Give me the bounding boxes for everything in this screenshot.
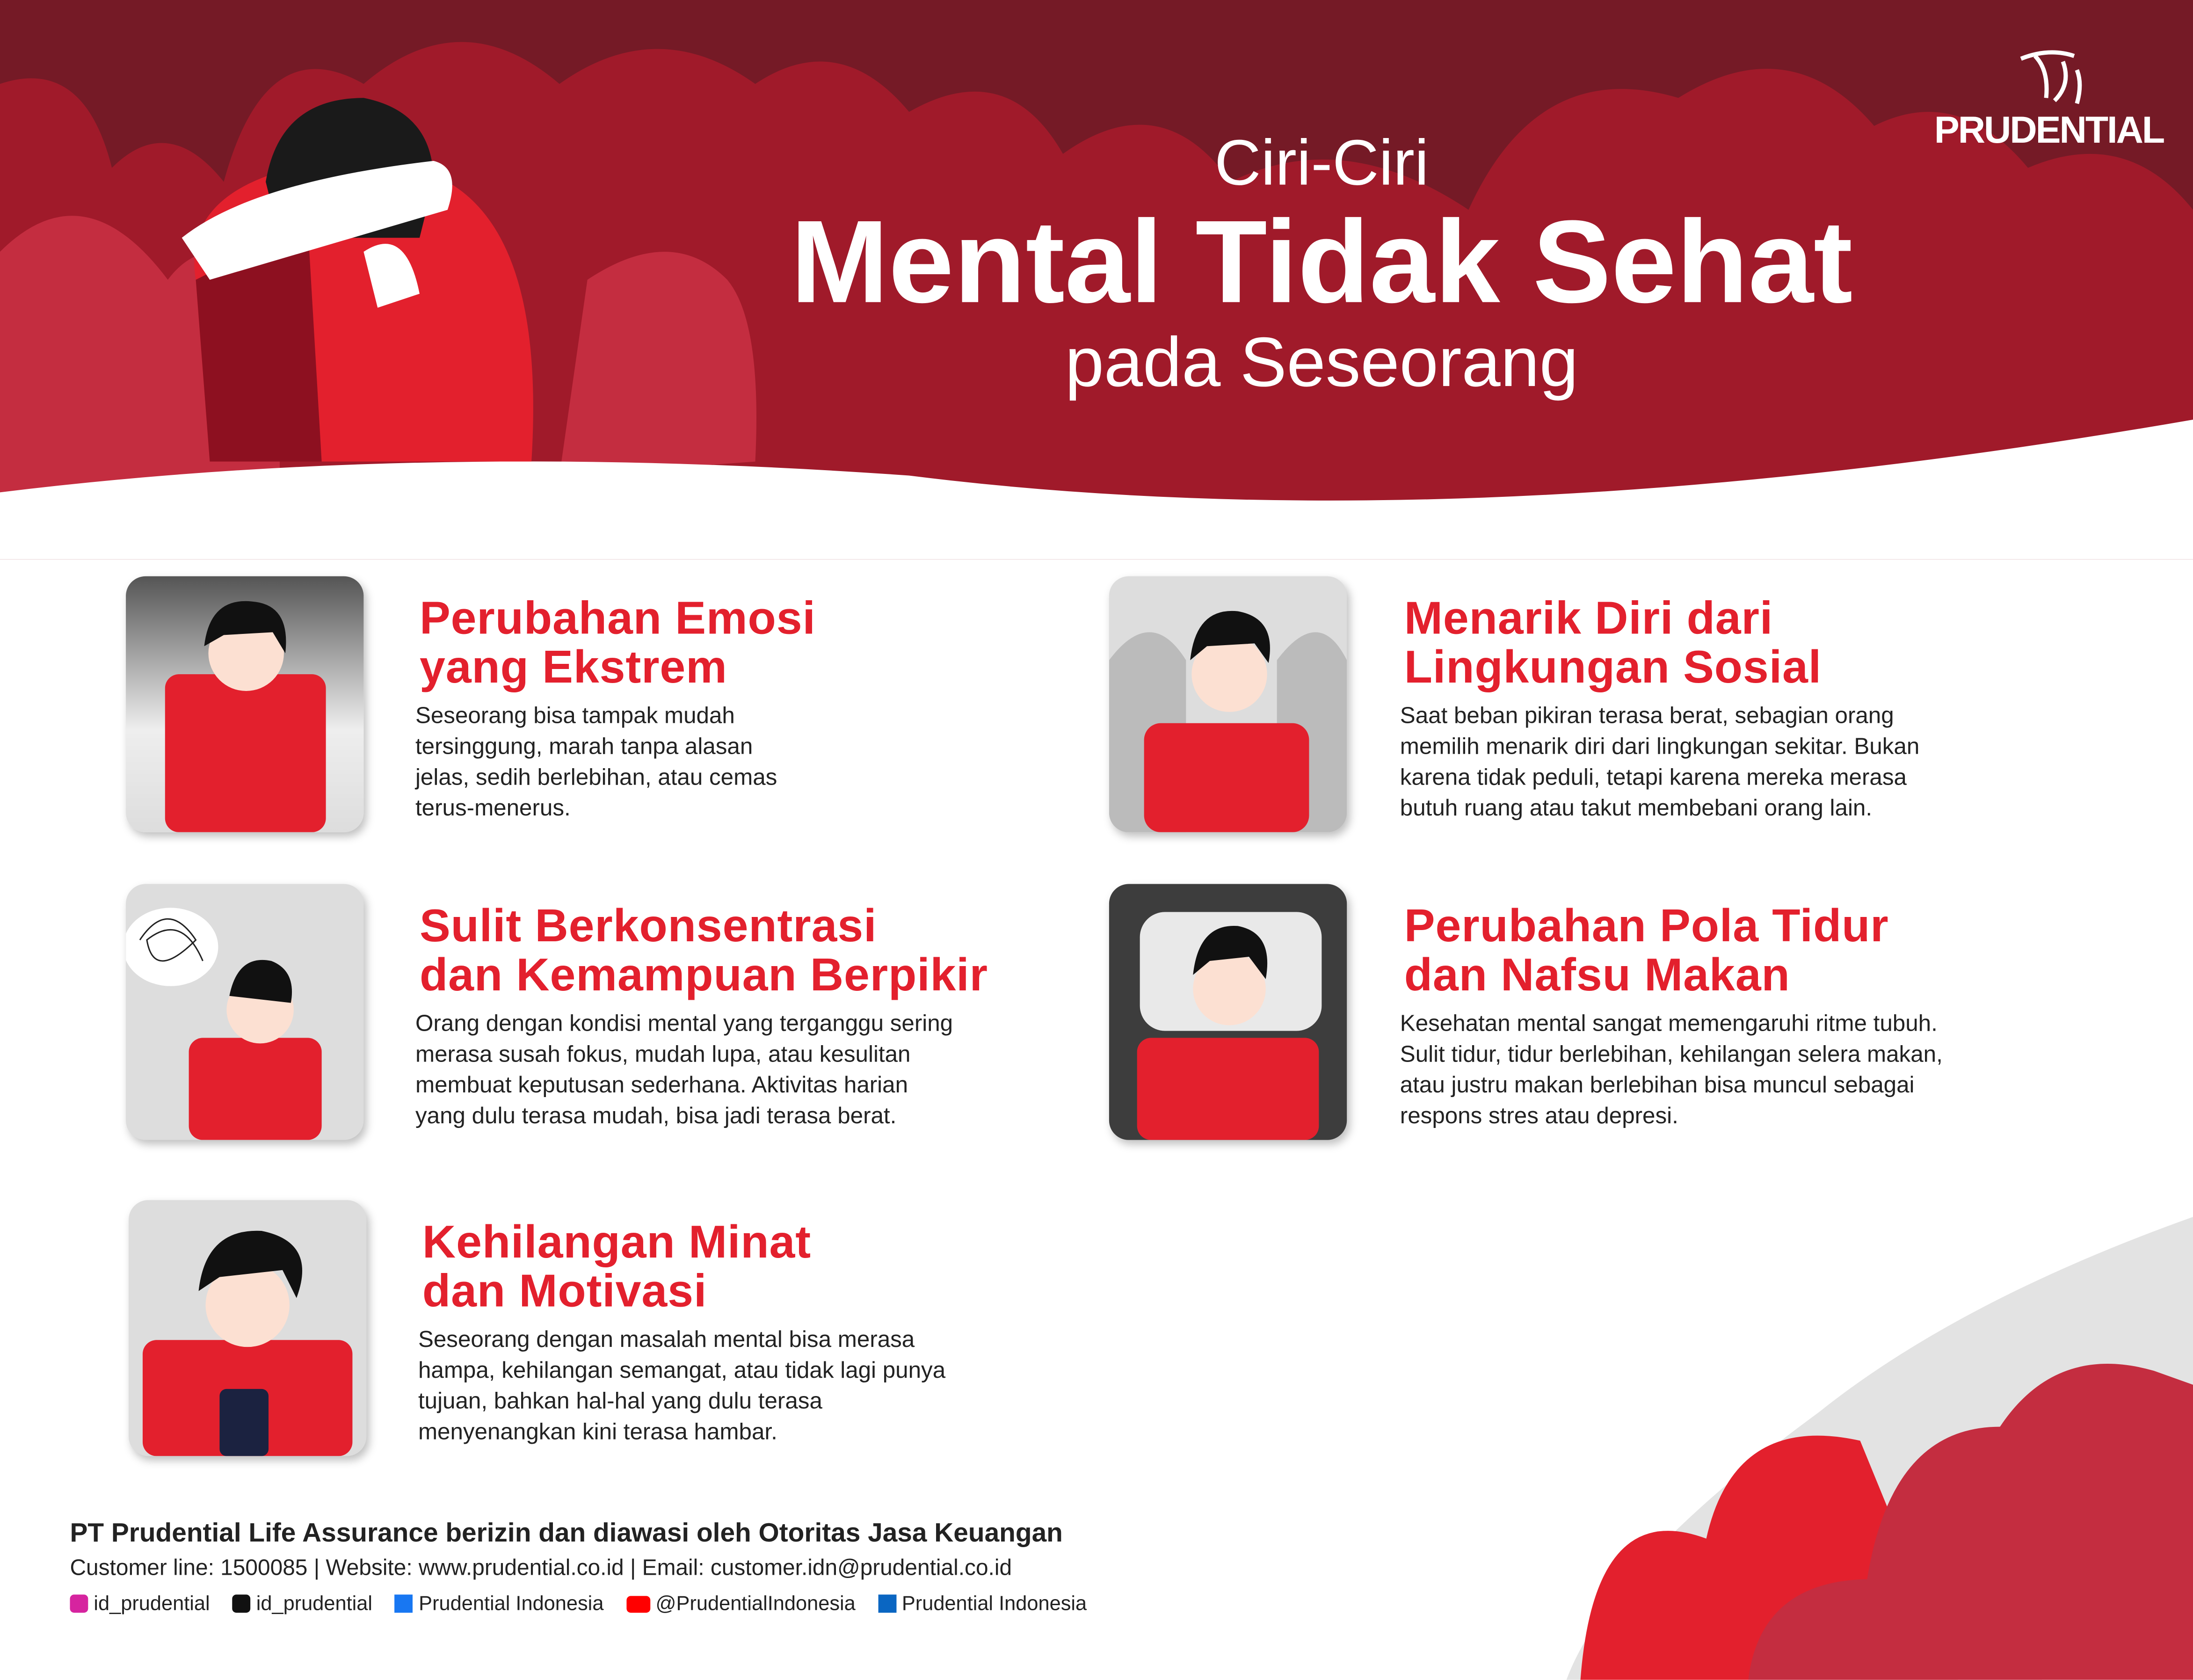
text: atau justru makan berlebihan bisa muncul sebagai <box>1400 1073 1914 1098</box>
panel: tidur <box>1091 867 2070 1175</box>
heading: Perubahan Pola Tidur <box>1404 899 1889 951</box>
footer <box>0 1511 1147 1622</box>
text: butuh ruang atau takut membebani orang lain. <box>1400 796 1872 821</box>
heading: dan Kemampuan Berpikir <box>420 948 988 1000</box>
text: terus-menerus. <box>415 796 571 821</box>
title <box>755 123 1888 403</box>
heading: Perubahan Emosi <box>420 592 816 643</box>
text: merasa susah fokus, mudah lupa, atau kesulitan <box>415 1042 910 1067</box>
text: Seseorang dengan masalah mental bisa merasa <box>418 1327 915 1353</box>
text: respons stres atau depresi. <box>1400 1104 1678 1129</box>
icon: sleepless boy <box>1109 884 1347 1140</box>
panel: sosial <box>1091 560 2070 839</box>
header background <box>0 0 2193 560</box>
icon: confused boy <box>126 884 363 1140</box>
text <box>415 701 777 824</box>
heading: dan Motivasi <box>422 1265 707 1316</box>
text <box>415 1009 953 1132</box>
title: Mental Tidak Sehat <box>791 196 1852 327</box>
heading <box>1404 593 1822 691</box>
footer: PT Prudential Life Assurance berizin dan diawasi oleh Otoritas Jasa Keuangan <box>70 1519 1063 1549</box>
text: tersinggung, marah tanpa alasan <box>415 735 753 759</box>
social icons: id_prudential id_prudential Prudential Indonesia @PrudentialIndonesia Prudential Indonesia <box>94 1593 1087 1615</box>
heading: Menarik Diri dari <box>1404 592 1773 643</box>
text <box>1400 1009 1943 1132</box>
footer: Customer line: 1500085 | Website: www.prudential.co.id | Email: customer.idn@prudential.co.id <box>70 1557 1012 1580</box>
heading: dan Nafsu Makan <box>1404 948 1790 1000</box>
text: Orang dengan kondisi mental yang terganggu sering <box>415 1011 953 1036</box>
text: tujuan, bahkan hal-hal yang dulu terasa <box>418 1389 822 1414</box>
text: hampa, kehilangan semangat, atau tidak lagi punya <box>418 1358 945 1383</box>
logo: PRUDENTIAL <box>1934 109 2164 151</box>
heading: Kehilangan Minat <box>422 1215 811 1267</box>
panel: motivasi <box>0 1183 1063 1477</box>
illustration: sad woman hugging knees <box>168 84 574 462</box>
heading: Sulit Berkonsentrasi <box>420 899 877 951</box>
bottom right decoration <box>1399 1217 2193 1680</box>
title: Ciri-Ciri <box>1214 126 1429 199</box>
text: jelas, sedih berlebihan, atau cemas <box>415 765 777 790</box>
logo <box>1930 42 2168 154</box>
text: Seseorang bisa tampak mudah <box>415 704 735 729</box>
heading <box>1404 901 1889 999</box>
text: memilih menarik diri dari lingkungan sekitar. Bukan <box>1400 735 1919 759</box>
text: Kesehatan mental sangat memengaruhi ritme tubuh. <box>1400 1011 1938 1036</box>
text: membuat keputusan sederhana. Aktivitas harian <box>415 1073 908 1098</box>
text: yang dulu terasa mudah, bisa jadi terasa berat. <box>415 1104 896 1129</box>
heading <box>420 593 816 691</box>
text: Saat beban pikiran terasa berat, sebagian orang <box>1400 704 1894 729</box>
title: pada Seseorang <box>1065 323 1578 401</box>
text: karena tidak peduli, tetapi karena mereka merasa <box>1400 765 1907 790</box>
text <box>1400 701 1919 824</box>
icon: withdrawn boy <box>1109 576 1347 832</box>
icon: sad boy <box>126 576 363 832</box>
panel: emosi <box>0 560 1063 839</box>
heading <box>422 1217 811 1315</box>
icon: boy with phone <box>129 1200 366 1456</box>
panel: konsentrasi <box>0 867 1063 1147</box>
heading <box>420 901 988 999</box>
text: menyenangkan kini terasa hambar. <box>418 1420 777 1445</box>
text: Sulit tidur, tidur berlebihan, kehilangan selera makan, <box>1400 1042 1943 1067</box>
text <box>418 1324 945 1447</box>
icon: logo head <box>2007 42 2091 109</box>
heading: Lingkungan Sosial <box>1404 640 1822 692</box>
heading: yang Ekstrem <box>420 640 727 692</box>
